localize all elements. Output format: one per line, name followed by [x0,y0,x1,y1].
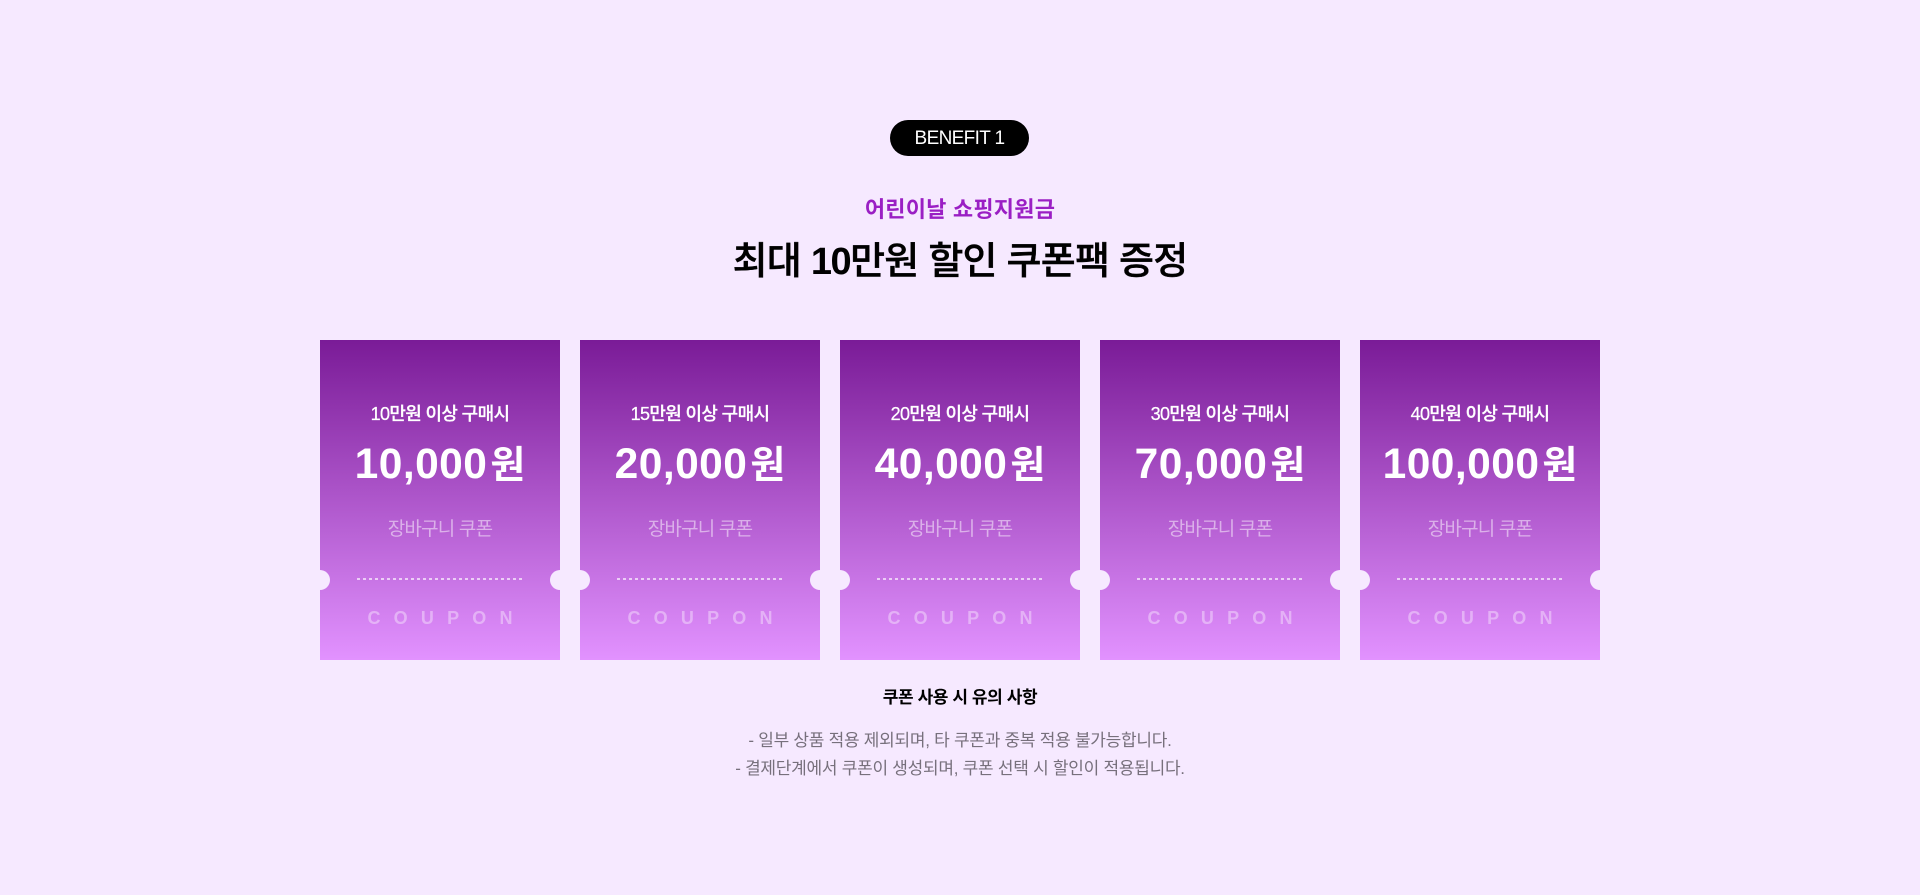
badge: BENEFIT 1: BENEFIT 1 [915,128,1004,149]
coupon type: 장바구니 쿠폰 [648,519,752,540]
coupon type: 장바구니 쿠폰 [1168,519,1272,540]
condition text: 15만원 이상 구매시 [631,404,769,424]
title: 최대 10만원 할인 쿠폰팩 증정 [733,241,1187,283]
condition text: 10만원 이상 구매시 [371,404,509,424]
coupon label: COUPON [367,608,526,628]
panel: coupon 40,000 [840,340,1080,660]
subtitle: 어린이날 쇼핑지원금 [865,197,1055,222]
condition text: 20만원 이상 구매시 [891,404,1029,424]
coupon type: 장바구니 쿠폰 [388,519,492,540]
coupon amount: 20,000원 [615,441,785,488]
panel: coupon 100,000 [1360,340,1600,660]
notice text [735,731,1185,778]
coupon amount: 10,000원 [355,441,525,488]
coupon amount: 40,000원 [875,441,1045,488]
coupon label: COUPON [1407,608,1566,628]
coupon label: COUPON [887,608,1046,628]
badge: BENEFIT 1 [890,120,1029,156]
coupon type: 장바구니 쿠폰 [908,519,1012,540]
coupon amount: 100,000원 [1383,441,1577,488]
coupon amount: 70,000원 [1135,441,1305,488]
panel: coupon 70,000 [1100,340,1340,660]
panel: coupon 20,000 [580,340,820,660]
coupon label: COUPON [1147,608,1306,628]
notice text: - 일부 상품 적용 제외되며, 타 쿠폰과 중복 적용 불가능합니다. [748,731,1172,750]
panel: coupon 10,000 [320,340,560,660]
condition text: 30만원 이상 구매시 [1151,404,1289,424]
notice text: - 결제단계에서 쿠폰이 생성되며, 쿠폰 선택 시 할인이 적용됩니다. [735,759,1185,778]
notice heading: 쿠폰 사용 시 유의 사항 [883,688,1037,707]
coupon type: 장바구니 쿠폰 [1428,519,1532,540]
coupon label: COUPON [627,608,786,628]
condition text: 40만원 이상 구매시 [1411,404,1549,424]
